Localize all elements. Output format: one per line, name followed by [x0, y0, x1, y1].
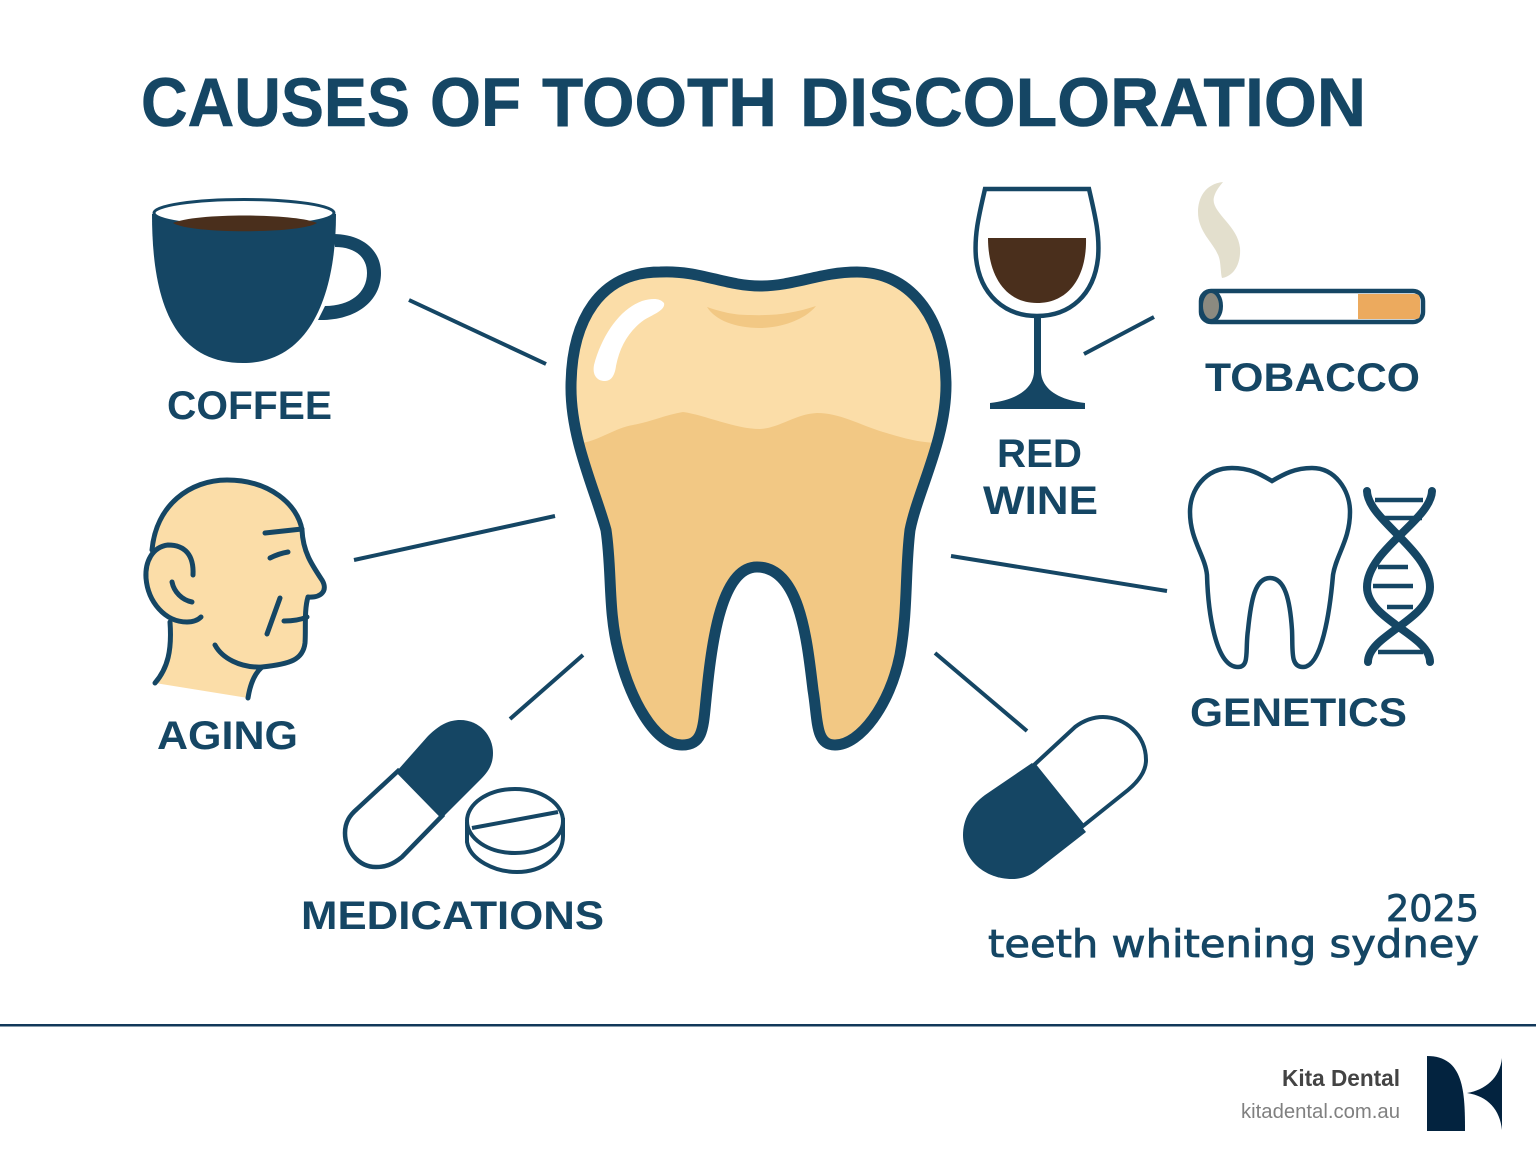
footer divider	[0, 1024, 1536, 1026]
stem and base	[990, 318, 1085, 409]
label: red wine	[983, 432, 1098, 523]
label: red wine: RED	[997, 432, 1082, 476]
outline tooth	[1190, 468, 1350, 667]
icon: cigarette	[1198, 182, 1423, 322]
footer brand text: kitadental.com.au	[1241, 1101, 1400, 1123]
cup rim	[154, 200, 334, 226]
tooth body	[571, 272, 946, 745]
label: aging: AGING	[157, 714, 298, 758]
dark half	[963, 763, 1086, 879]
icon: aging head	[146, 480, 324, 698]
wine	[988, 238, 1086, 303]
title: CAUSES	[141, 64, 410, 141]
icon: capsule	[963, 717, 1146, 879]
white half	[1034, 717, 1146, 826]
glass outline	[976, 189, 1098, 316]
stained lower area	[582, 412, 936, 745]
round tablet	[467, 789, 563, 872]
filter	[1358, 294, 1420, 319]
central tooth illustration	[571, 272, 946, 745]
cup body	[152, 214, 336, 363]
title	[141, 64, 1366, 141]
logo	[1427, 1056, 1502, 1131]
highlight	[594, 299, 664, 381]
title: DISCOLORATION	[800, 64, 1366, 141]
label: coffee: COFFEE	[167, 384, 332, 428]
coffee	[173, 216, 317, 231]
label: medications: MEDICATIONS	[301, 894, 604, 938]
capsule dark half	[397, 720, 493, 818]
icon: coffee cup	[152, 200, 381, 363]
label: tobacco: TOBACCO	[1205, 356, 1420, 400]
caption: year and keyword	[988, 887, 1479, 966]
cigarette body	[1201, 291, 1423, 322]
cup handle	[318, 234, 381, 320]
smoke	[1198, 182, 1240, 278]
head fill	[147, 480, 324, 698]
connector lines	[354, 300, 1167, 731]
DNA helix	[1367, 491, 1432, 662]
footer brand text	[1241, 1065, 1400, 1123]
footer brand text: Kita Dental	[1282, 1065, 1400, 1091]
caption: year and keyword: 2025	[1386, 887, 1479, 930]
ash end	[1201, 291, 1221, 321]
label: genetics: GENETICS	[1190, 691, 1407, 735]
icon: medication pills	[345, 720, 563, 872]
crown groove	[707, 306, 816, 328]
tooth outline	[571, 272, 946, 745]
label: red wine: WINE	[983, 479, 1098, 523]
capsule white half	[345, 771, 442, 867]
head outlines	[146, 480, 324, 698]
title: OF	[430, 64, 521, 141]
title: TOOTH	[542, 64, 777, 141]
icon: red wine glass	[976, 189, 1098, 409]
icon: genetics tooth and DNA	[1190, 468, 1432, 667]
caption: year and keyword: teeth whitening sydney	[988, 922, 1479, 966]
